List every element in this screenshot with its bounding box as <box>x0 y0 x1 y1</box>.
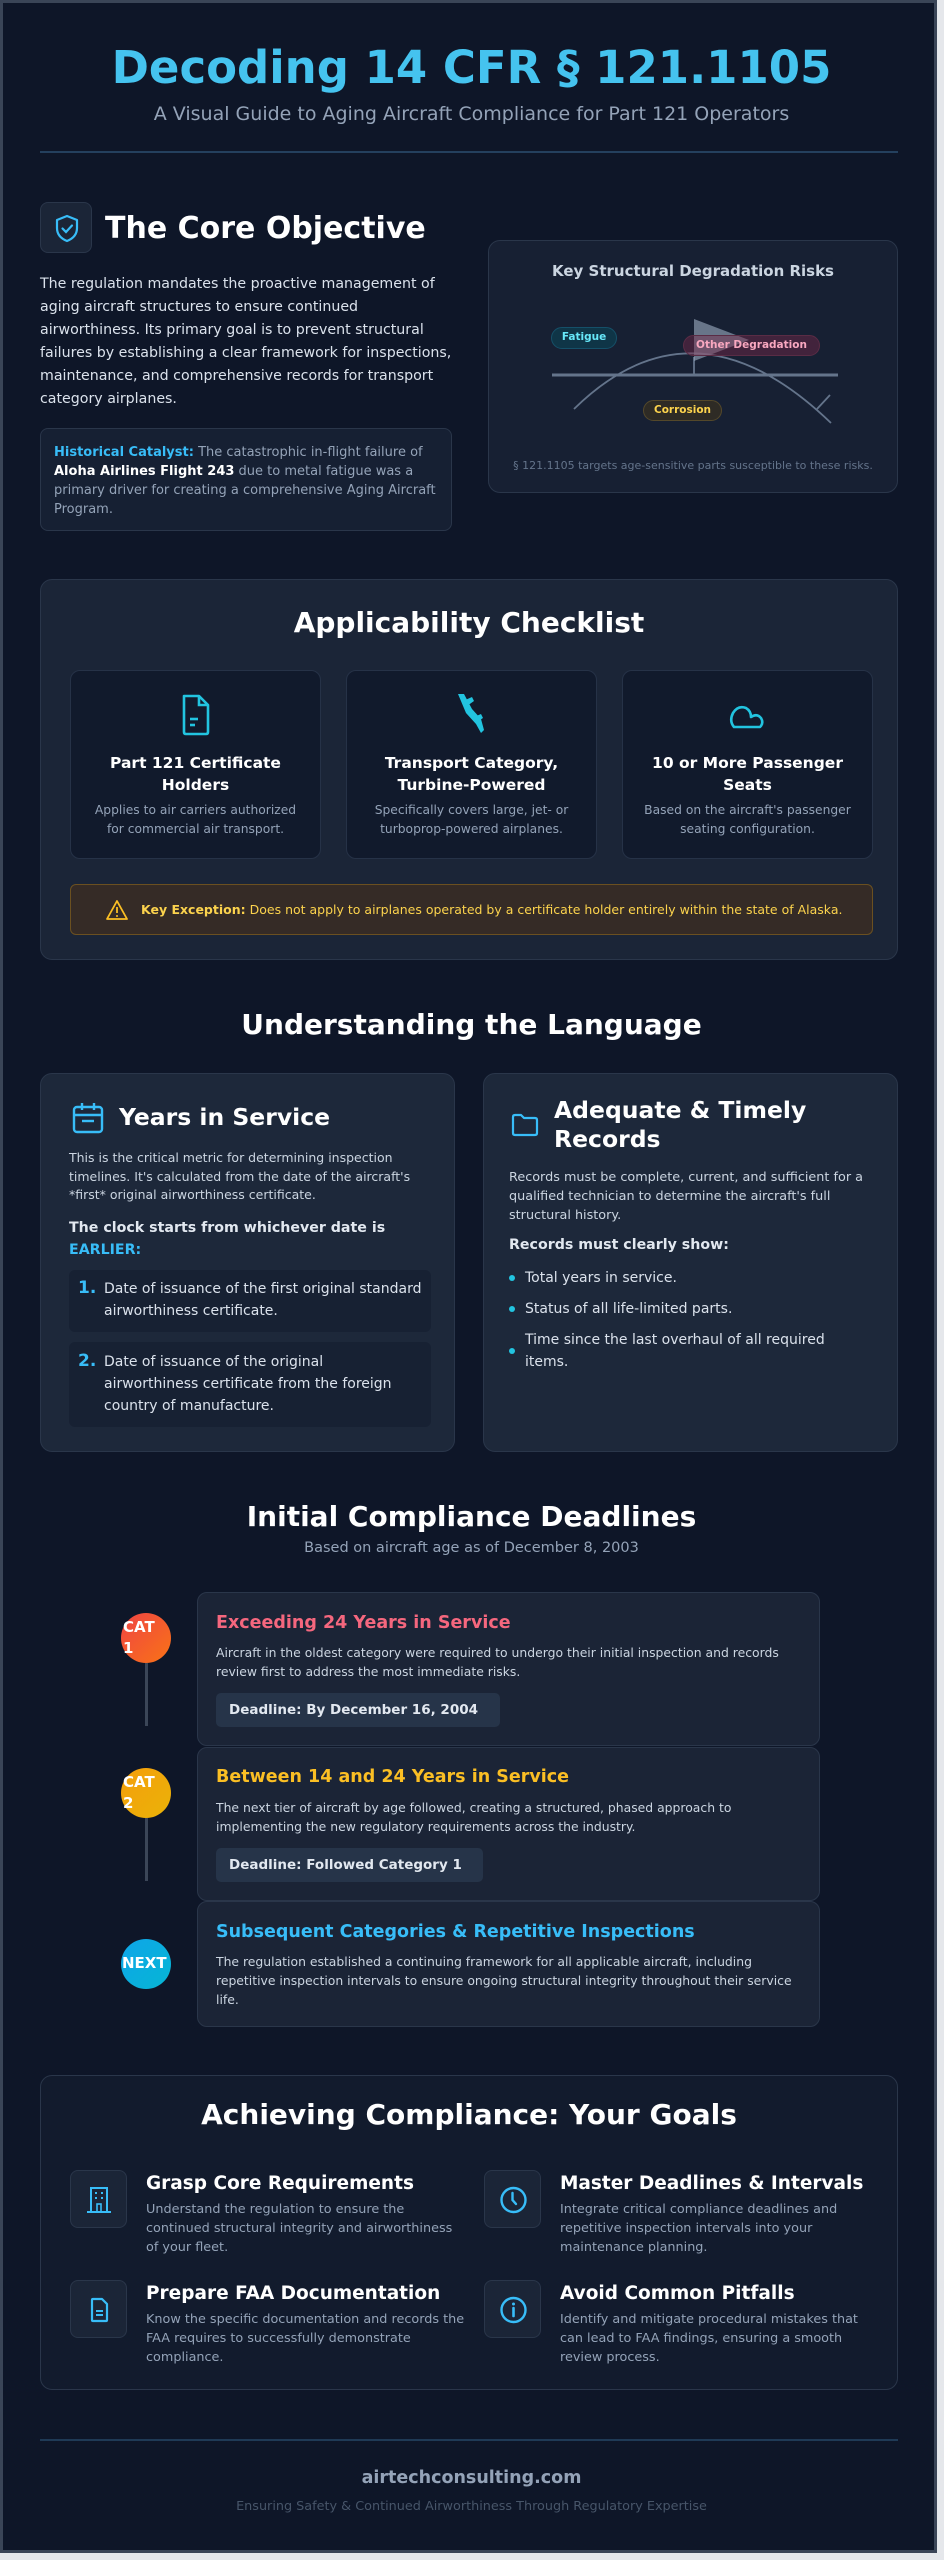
heading: understanding the language: Understanding the Language <box>241 1008 702 1041</box>
marker: CAT 2: 2 <box>123 1794 133 1812</box>
heading: Achieving Compliance: Your Goals <box>201 2098 737 2131</box>
callout: historical catalyst: Historical Catalyst: The catastrophic in-flight failure of <box>54 445 423 460</box>
text: core objective paragraph: maintenance, and comprehensive records for transport <box>40 368 433 384</box>
callout: key exception <box>70 884 873 935</box>
marker: CAT 2 <box>121 1768 171 1818</box>
goal: avoid pitfalls <box>484 2280 858 2365</box>
card: category 2: The next tier of aircraft by age followed, creating a structured, phased approach to <box>216 1800 731 1815</box>
list item 2 <box>69 1342 431 1427</box>
icon: folder <box>512 1114 538 1136</box>
card: passenger seats: Based on the aircraft's passenger <box>644 803 851 817</box>
text: core objective paragraph: failures by establishing a clear framework for inspections, <box>40 345 451 361</box>
card: subsequent <box>197 1901 820 2027</box>
card: category 1: Exceeding 24 Years in Service <box>216 1613 511 1633</box>
chart: structure diagram <box>552 319 838 424</box>
panel: adequate records: structural history. <box>509 1208 621 1223</box>
marker: NEXT <box>121 1939 171 1989</box>
callout: historical catalyst <box>40 428 452 531</box>
card: subsequent: Subsequent Categories & Repetitive Inspections <box>216 1922 695 1942</box>
list item 2: airworthiness certificate from the foreign <box>104 1376 392 1392</box>
goal: grasp core requirements <box>70 2170 452 2255</box>
text: core objective paragraph: category airplanes. <box>40 391 177 407</box>
card: category 1: Aircraft in the oldest category were required to undergo their initial inspection and records <box>216 1645 779 1660</box>
card: transport category <box>346 670 597 859</box>
title: Decoding 14 CFR § 121.1105 <box>112 41 831 94</box>
bullet list <box>509 1270 825 1370</box>
list item 1 <box>69 1270 431 1332</box>
pill: corrosion <box>643 400 722 421</box>
card: subsequent: life. <box>216 1992 239 2007</box>
card: transport category: Transport Category, <box>385 754 558 772</box>
timeline <box>121 1592 820 2027</box>
panel: adequate records: Records must clearly show: <box>509 1237 729 1253</box>
bullet list: Status of all life-limited parts. <box>525 1301 732 1317</box>
goal: prepare FAA documentation: FAA requires to successfully demonstrate <box>146 2331 411 2346</box>
card: transport category: Specifically covers large, jet- or <box>375 803 568 817</box>
panel: years in service: EARLIER: <box>69 1242 141 1258</box>
card: part 121: for commercial air transport. <box>107 822 284 836</box>
marker: NEXT: NEXT <box>122 1954 167 1972</box>
card: part 121: Part 121 Certificate <box>110 754 281 772</box>
card: part 121: Applies to air carriers authorized <box>95 803 296 817</box>
subtitle: deadlines: Based on aircraft age as of December 8, 2003 <box>304 1540 639 1556</box>
panel: achieving compliance goals <box>40 2075 898 2390</box>
footer: tagline: Ensuring Safety & Continued Airworthiness Through Regulatory Expertise <box>236 2499 707 2514</box>
card: passenger seats <box>622 670 873 859</box>
goal: avoid pitfalls: Avoid Common Pitfalls <box>560 2283 795 2304</box>
bullet list: Time since the last overhaul of all required <box>525 1332 825 1348</box>
callout: key exception: Key Exception: Does not apply to airplanes operated by a certificate holder entirely within the state of Alaska. <box>141 902 842 917</box>
goal: prepare FAA documentation: Know the specific documentation and records the <box>146 2312 464 2327</box>
panel: degradation risks chart <box>488 240 898 493</box>
panel: adequate records: qualified technician to determine the aircraft's full <box>509 1189 830 1204</box>
pill: corrosion: Corrosion <box>654 404 711 416</box>
goal: prepare FAA documentation: compliance. <box>146 2350 224 2365</box>
list item 2: country of manufacture. <box>104 1398 274 1414</box>
goal: prepare FAA documentation <box>70 2280 464 2365</box>
callout: historical catalyst: Program. <box>54 502 113 517</box>
goal: grasp core requirements: of your fleet. <box>146 2240 228 2255</box>
goal: master deadlines: repetitive inspection intervals into your <box>560 2221 812 2236</box>
goal: master deadlines: Master Deadlines & Intervals <box>560 2173 863 2194</box>
panel: years in service: *first* original airworthiness certificate. <box>69 1187 316 1202</box>
panel: years in service: The clock starts from whichever date is <box>69 1220 385 1236</box>
list item 1: Date of issuance of the first original standard <box>104 1281 421 1297</box>
panel: adequate records: Adequate & Timely <box>554 1096 806 1124</box>
list item 1: airworthiness certificate. <box>104 1303 278 1319</box>
card: category 1: Deadline: By December 16, 2004 <box>229 1702 478 1718</box>
panel: applicability checklist <box>40 579 898 960</box>
connector lines <box>145 1663 148 1726</box>
goal: avoid pitfalls: can lead to FAA findings, ensuring a smooth <box>560 2331 842 2346</box>
text: core objective paragraph: aging aircraft structures to ensure continued <box>40 299 358 315</box>
text: core objective paragraph <box>40 276 451 407</box>
footer: site name: airtechconsulting.com <box>362 2468 581 2488</box>
goal: grasp core requirements: continued structural integrity and airworthiness <box>146 2221 452 2236</box>
card: part 121 <box>70 670 321 859</box>
caption: § 121.1105 targets age-sensitive parts susceptible to these risks. <box>513 459 873 472</box>
bullet list: items. <box>525 1354 568 1370</box>
marker: CAT 1: 1 <box>123 1639 133 1657</box>
heading: Applicability Checklist <box>294 606 644 639</box>
panel: adequate records <box>483 1073 898 1452</box>
pill: other degradation: Other Degradation <box>696 339 807 351</box>
panel: adequate records: Records <box>554 1125 661 1153</box>
panel: years in service: This is the critical metric for determining inspection <box>69 1150 393 1165</box>
heading: core objective: The Core Objective <box>105 211 426 246</box>
callout: historical catalyst: primary driver for creating a comprehensive Aging Aircraft <box>54 483 436 498</box>
card: part 121: Holders <box>162 776 229 794</box>
text: core objective paragraph: airworthiness. Its primary goal is to prevent structural <box>40 322 424 338</box>
marker: CAT 2: CAT <box>123 1773 155 1791</box>
card: subsequent: repetitive inspection intervals to ensure ongoing structural integrity throughout their service <box>216 1973 792 1988</box>
panel: adequate records: Records must be complete, current, and sufficient for a <box>509 1170 863 1185</box>
goal: grasp core requirements: Grasp Core Requirements <box>146 2173 414 2194</box>
goal: master deadlines <box>484 2170 863 2255</box>
card: passenger seats: seating configuration. <box>680 822 815 836</box>
bullet list: Total years in service. <box>525 1270 677 1286</box>
goal: avoid pitfalls: review process. <box>560 2350 660 2365</box>
card: category 1: review first to address the most immediate risks. <box>216 1664 520 1679</box>
pill: fatigue: Fatigue <box>562 331 606 343</box>
goal: prepare FAA documentation: Prepare FAA Documentation <box>146 2283 440 2304</box>
chart title: Key Structural Degradation Risks <box>552 262 834 280</box>
card: category 2: Deadline: Followed Category 1 <box>229 1857 462 1873</box>
pill: other degradation <box>683 335 820 356</box>
text: core objective paragraph: The regulation mandates the proactive management of <box>40 276 435 292</box>
subtitle: A Visual Guide to Aging Aircraft Compliance for Part 121 Operators <box>154 103 789 125</box>
list item 2: Date of issuance of the original <box>104 1354 323 1370</box>
heading: initial compliance deadlines: Initial Compliance Deadlines <box>247 1500 696 1533</box>
card: transport category: turboprop-powered airplanes. <box>380 822 563 836</box>
card: passenger seats: 10 or More Passenger <box>652 754 843 772</box>
card: category 2: Between 14 and 24 Years in Service <box>216 1767 569 1787</box>
card: subsequent: The regulation established a continuing framework for all applicable aircraft, including <box>216 1954 752 1969</box>
pill: fatigue <box>551 327 617 349</box>
card: passenger seats: Seats <box>723 776 772 794</box>
list item 1: 1. <box>78 1278 96 1298</box>
panel: years in service: timelines. It's calculated from the date of the aircraft's <box>69 1169 410 1184</box>
panel: years in service: Years in Service <box>119 1103 330 1131</box>
icon: calendar <box>72 1103 104 1134</box>
goal: master deadlines: maintenance planning. <box>560 2240 708 2255</box>
goal: grasp core requirements: Understand the regulation to ensure the <box>146 2202 404 2217</box>
marker: CAT 1: CAT <box>123 1618 155 1636</box>
card: category 1 <box>197 1592 820 1746</box>
card: category 2 <box>197 1747 820 1901</box>
panel: years in service <box>40 1073 455 1452</box>
callout: historical catalyst: Aloha Airlines Flight 243 due to metal fatigue was a <box>54 464 413 479</box>
marker: CAT 1 <box>121 1613 171 1663</box>
list item 2: 2. <box>78 1351 96 1371</box>
icon: shield <box>40 202 92 253</box>
goal: master deadlines: Integrate critical compliance deadlines and <box>560 2202 837 2217</box>
card: transport category: Turbine-Powered <box>397 776 546 794</box>
goal: avoid pitfalls: Identify and mitigate procedural mistakes that <box>560 2312 858 2327</box>
card: category 2: implementing the new regulatory requirements across the industry. <box>216 1819 635 1834</box>
